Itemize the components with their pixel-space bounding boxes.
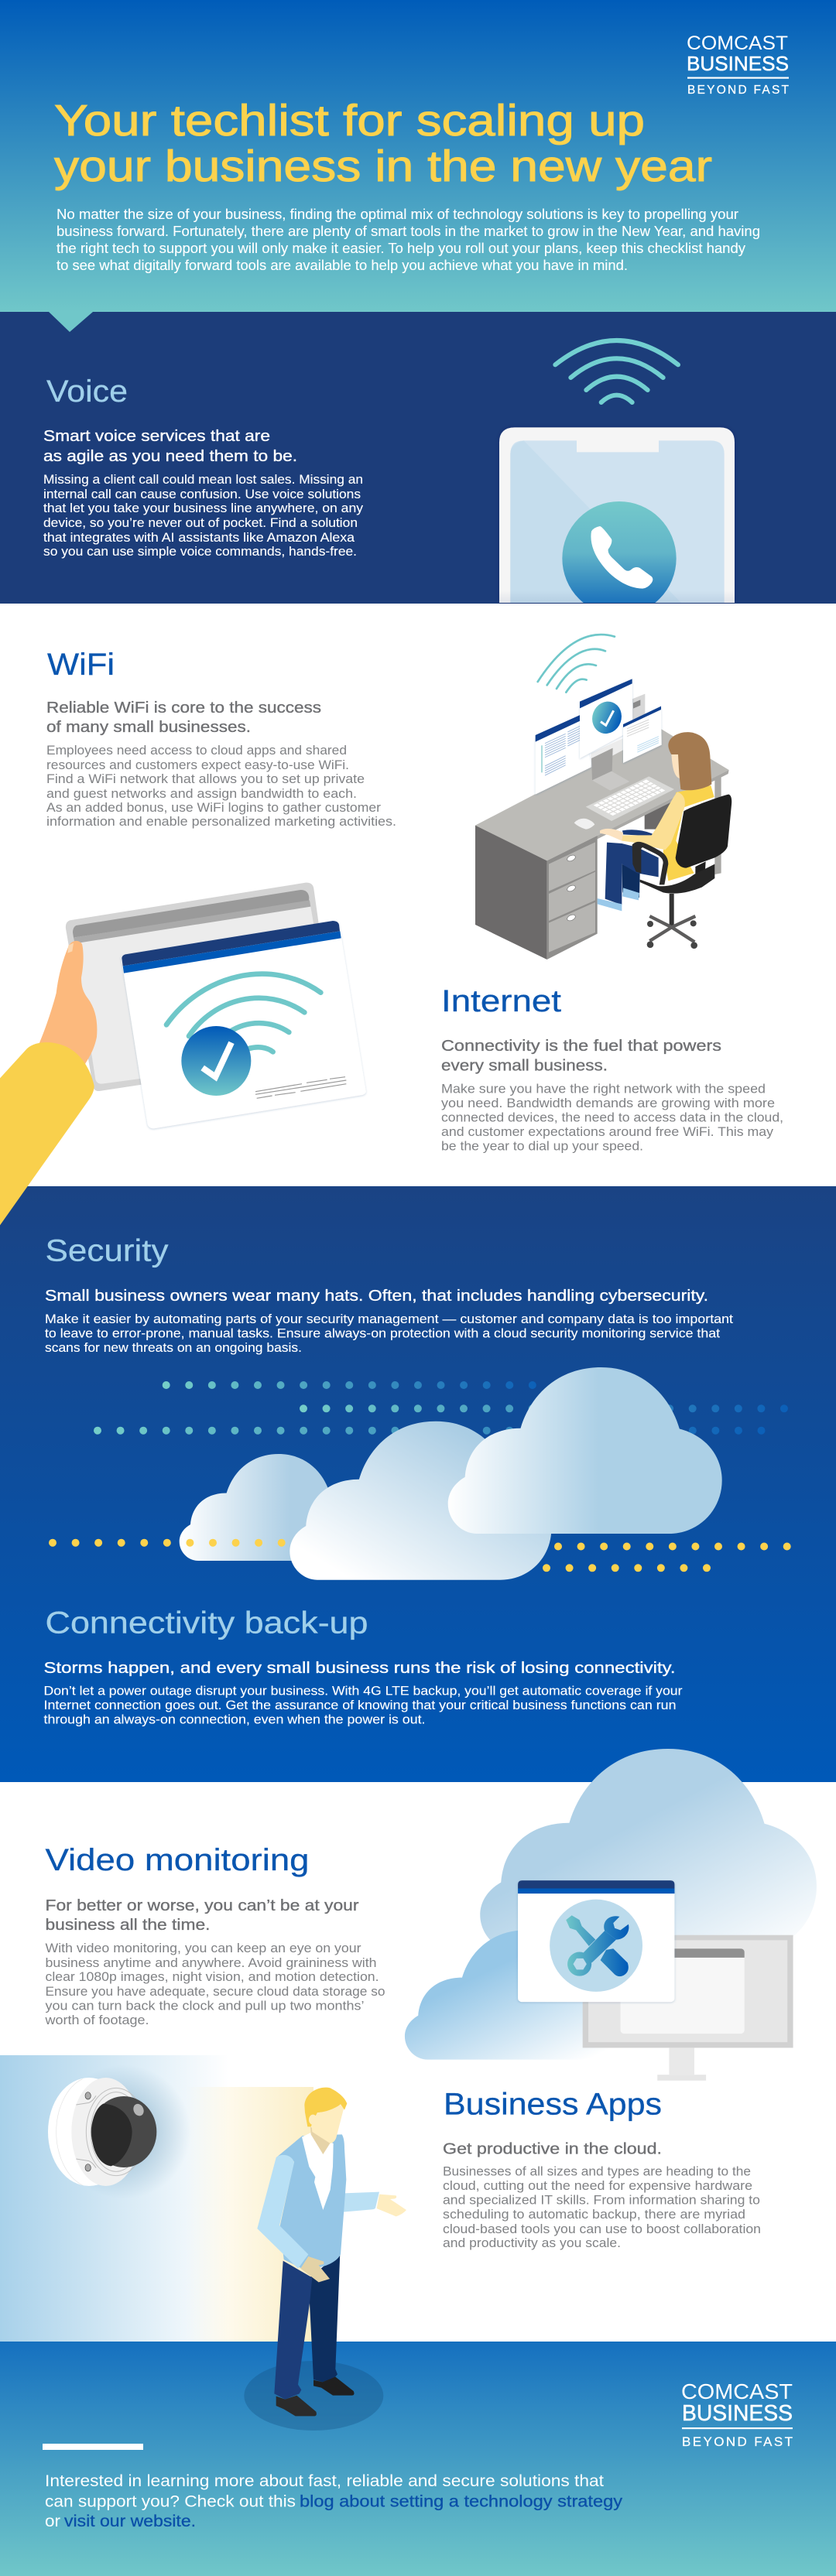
body text: business apps: Businesses of all sizes and types are heading to the [443, 2165, 751, 2179]
body text: voice: so you can use simple voice commands, hands-free. [43, 545, 357, 559]
woman [598, 732, 714, 911]
body text: security [45, 1312, 733, 1355]
panel: video monitoring and business apps background [0, 1782, 836, 2342]
body text: voice: that let you take your business line anywhere, on any [43, 501, 364, 515]
subheading: wifi [46, 699, 321, 736]
illustration: man standing [244, 2088, 406, 2431]
illustration: woman at desk with screens [475, 635, 732, 960]
subheading: connectivity back-up: Storms happen, and every small business runs the risk of losing connectivity. [43, 1659, 675, 1677]
monitor [583, 1935, 793, 2081]
body text: video monitoring: clear 1080p images, night vision, and motion detection. [45, 1970, 379, 1984]
gradient band: warm light [186, 2087, 314, 2342]
call to action text: Interested in learning more about fast, reliable and secure solutions that [45, 2472, 604, 2490]
body text: wifi: As an added bonus, use WiFi logins to gather customer [46, 801, 382, 815]
illustration: security camera [48, 2065, 191, 2199]
body text: business apps: cloud-based tools you can use to boost collaboration [443, 2222, 761, 2236]
body text: video monitoring: you can turn back the clock and pull up two months’ [45, 2000, 364, 2013]
subheading: video monitoring [45, 1897, 359, 1934]
office chair [632, 795, 732, 949]
left arm and hand [257, 2155, 330, 2282]
intro text: the right tech to support you will only make it easier. To help you roll out your plans, keep this checklist handy [57, 241, 745, 256]
icon: wifi signal [555, 340, 678, 402]
illustration: hand holding tablet with wifi check [0, 883, 366, 1225]
subheading: internet: every small business. [441, 1057, 608, 1074]
dot rows: yellow, behind clouds [546, 1546, 790, 1568]
front cloud [405, 1930, 621, 2060]
body text: voice: Missing a client call could mean lost sales. Missing an [43, 473, 363, 487]
cloud: small [180, 1454, 358, 1561]
body text: wifi: information and enable personalized marketing activities. [46, 815, 396, 829]
body text: internet [441, 1083, 783, 1154]
body text: voice: device, so you’re never out of pocket. Find a solution [43, 516, 358, 530]
subheading: voice [43, 427, 297, 465]
hand [39, 941, 97, 1064]
heading: Connectivity back-up: Connectivity back-up [45, 1606, 368, 1640]
panel: header [0, 0, 836, 312]
call to action text: can support you? Check out this [45, 2492, 296, 2511]
call to action text: visit our website. [64, 2512, 196, 2530]
call to action text [45, 2472, 622, 2530]
body text: security: Make it easier by automating parts of your security management — customer and company data is too important [45, 1312, 733, 1326]
subheading: video monitoring: business all the time. [45, 1916, 211, 1934]
body text: security: scans for new threats on an ongoing basis. [45, 1341, 302, 1355]
body text: connectivity back-up: through an always-on connection, even when the power is out. [43, 1713, 426, 1727]
subheading: internet: Connectivity is the fuel that powers [441, 1037, 721, 1055]
intro text: No matter the size of your business, finding the optimal mix of technology solutions is key to propelling your [57, 207, 738, 222]
icon: tools [566, 1915, 629, 1976]
body text: video monitoring: With video monitoring, you can keep an eye on your [45, 1941, 361, 1955]
subheading: wifi: Reliable WiFi is core to the success [46, 699, 321, 717]
subheading: security: Small business owners wear many hats. Often, that includes handling cybersecurity. [45, 1287, 708, 1305]
title [54, 96, 712, 191]
intro text: to see what digitally forward tools are available to help you achieve what you have in mind. [57, 258, 628, 273]
panel: wifi text [46, 648, 396, 829]
body text: connectivity back-up: Don’t let a power outage disrupt your business. With 4G LTE backup, you’ll get automatic coverage if your [43, 1685, 683, 1699]
heading: Security: Security [45, 1233, 169, 1267]
body text: internet: you need. Bandwidth demands are growing with more [441, 1096, 775, 1110]
body text: wifi: and guest networks and assign bandwidth to each. [46, 787, 357, 801]
title: Your techlist for scaling up [54, 96, 645, 145]
body text: wifi [46, 744, 396, 829]
dot row: yellow over small cloud [53, 1539, 286, 1547]
floating windows [536, 679, 662, 795]
head and hair [304, 2088, 347, 2143]
body text: business apps: cloud, cutting out the need for expensive hardware [443, 2179, 752, 2193]
body text: wifi: Find a WiFi network that allows you to set up private [46, 772, 365, 786]
intro text [57, 207, 760, 273]
body text: video monitoring: Ensure you have adequate, secure cloud data storage so [45, 1985, 385, 1999]
body text: internet: be the year to dial up your speed. [441, 1140, 643, 1154]
heading: Internet: Internet [441, 984, 561, 1018]
subheading: internet [441, 1037, 721, 1074]
panel: business apps text [443, 2088, 761, 2250]
body text: business apps: and productivity as you scale. [443, 2236, 621, 2250]
heading: Business Apps: Business Apps [444, 2088, 662, 2122]
body text: business apps: and specialized IT skills. From information sharing to [443, 2194, 760, 2208]
subheading: wifi: of many small businesses. [46, 718, 251, 736]
vest and shirt [276, 2126, 346, 2269]
icon: smartphone with call button [499, 427, 735, 615]
body text: security: to leave to error-prone, manual tasks. Ensure always-on protection with a cloud security monitoring service that [45, 1326, 720, 1340]
panel: video monitoring text [44, 1843, 385, 2027]
body text: video monitoring [44, 1941, 385, 2027]
subheading: voice: as agile as you need them to be. [43, 447, 297, 465]
white rule [43, 2444, 143, 2450]
body text: voice: that integrates with AI assistants like Amazon Alexa [43, 531, 355, 545]
subheading: video monitoring: For better or worse, you can’t be at your [45, 1897, 359, 1914]
logo: Comcast Business footer: BEYOND FAST [682, 2434, 793, 2449]
body text: video monitoring: business anytime and anywhere. Avoid graininess with [45, 1956, 376, 1970]
yellow sleeve [0, 1042, 94, 1225]
body text: voice: internal call can cause confusion. Use voice solutions [43, 487, 361, 501]
cloud: right [448, 1367, 722, 1534]
panel: security and connectivity back-up [0, 1186, 836, 1782]
body text: business apps [443, 2165, 761, 2250]
panel: voice [0, 312, 836, 615]
panel: footer [0, 2342, 836, 2576]
subheading: voice: Smart voice services that are [43, 427, 270, 445]
keyboard and mouse [574, 776, 674, 830]
logo: Comcast Business footer: COMCAST [681, 2379, 793, 2403]
pointer triangle [49, 312, 93, 332]
dot rows: teal to blue [98, 1385, 790, 1431]
gradient band: camera blue [0, 2055, 228, 2342]
body text: internet: connected devices, the need to access data in the cloud, [441, 1110, 783, 1124]
call to action text: blog about setting a technology strategy [300, 2492, 622, 2511]
rear cloud [480, 1749, 817, 1952]
call to action text: or [45, 2512, 60, 2530]
logo: Comcast Business: COMCAST [687, 32, 788, 54]
extended arm and hand [343, 2192, 406, 2216]
logo: Comcast Business [687, 32, 790, 97]
heading: Video monitoring: Video monitoring [45, 1843, 309, 1877]
title: your business in the new year [54, 142, 712, 191]
body text: voice [43, 473, 364, 559]
logo: Comcast Business: BUSINESS [687, 52, 789, 75]
body text: connectivity back-up: Internet connection goes out. Get the assurance of knowing that your critical business functions can run [43, 1699, 676, 1712]
intro text: business forward. Fortunately, there are plenty of smart tools in the market to grow in the New Year, and having [57, 224, 760, 239]
front window [122, 921, 366, 1128]
rear tablet [66, 883, 335, 1091]
wifi arcs [538, 635, 615, 693]
heading: Voice: Voice [46, 375, 128, 409]
body text: internet: and customer expectations around free WiFi. This may [441, 1125, 774, 1139]
panel: internet text [441, 984, 783, 1154]
illustration: cloud, monitor and tools window [405, 1749, 817, 2081]
body text: business apps: scheduling to automatic backup, there are myriad [443, 2208, 745, 2222]
trousers and shoes [274, 2253, 355, 2416]
body text: internet: Make sure you have the right network with the speed [441, 1083, 766, 1096]
logo: Comcast Business: BEYOND FAST [687, 84, 790, 97]
cloud: middle [290, 1421, 551, 1580]
front window [518, 1880, 674, 2002]
floor shadow [244, 2361, 383, 2431]
desk [475, 729, 729, 960]
logo: Comcast Business footer: BUSINESS [682, 2401, 793, 2426]
logo: Comcast Business footer [681, 2379, 793, 2449]
body text: video monitoring: worth of footage. [44, 2013, 149, 2027]
body text: connectivity back-up [43, 1685, 683, 1727]
subheading: business apps: Get productive in the cloud. [443, 2140, 662, 2158]
panel: wifi and internet background [0, 604, 836, 1186]
body text: wifi: Employees need access to cloud apps and shared [46, 744, 347, 758]
body text: wifi: resources and customers expect easy-to-use WiFi. [46, 758, 349, 772]
heading: WiFi: WiFi [47, 648, 115, 682]
monitor stand [591, 694, 645, 791]
